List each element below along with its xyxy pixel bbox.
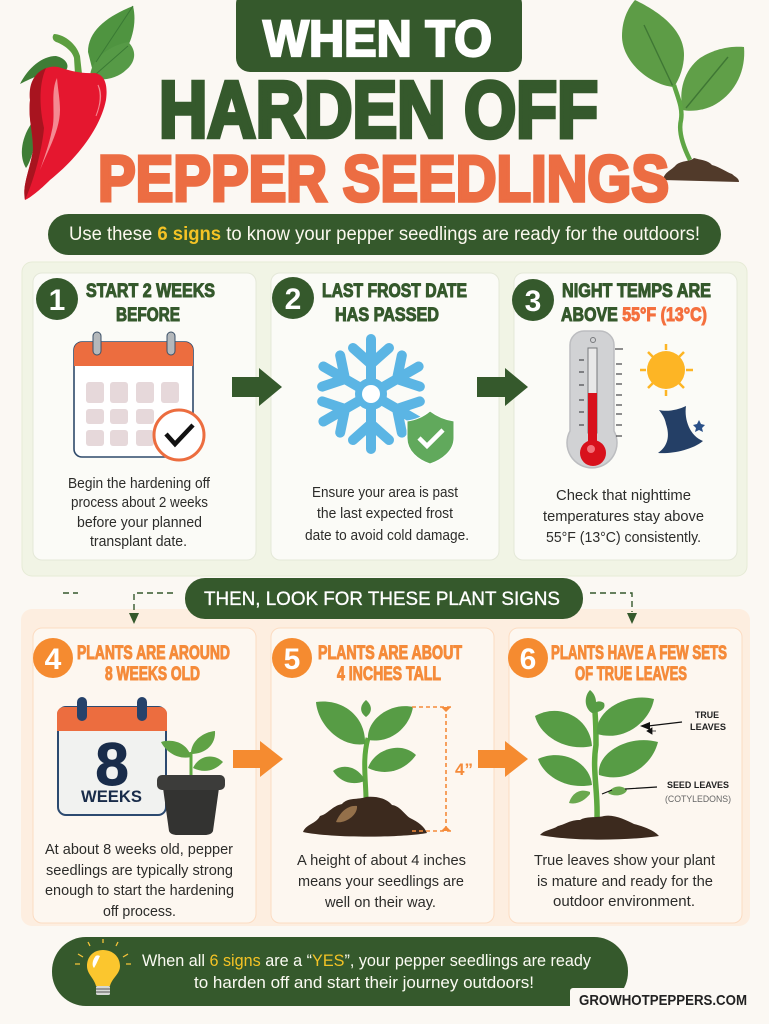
- icon: seedling with soil: [622, 0, 744, 182]
- description 5: means your seedlings are: [298, 874, 464, 890]
- heading 3: ABOVE 55°F (13°C): [561, 305, 707, 326]
- description 1: transplant date.: [90, 534, 187, 550]
- closing message: When all 6 signs are a “YES”, your pepper seedlings are ready: [142, 951, 591, 970]
- badge 5: [272, 638, 312, 678]
- card 3: night temps: [512, 273, 737, 560]
- heading 2: [322, 281, 467, 326]
- height marker: 4 inches: [412, 707, 473, 831]
- icon: red pepper: [20, 6, 134, 200]
- description 2: the last expected frost: [317, 506, 453, 522]
- badge 6: [508, 638, 548, 678]
- badge 4: [33, 638, 73, 678]
- icon: 8 weeks calendar: WEEKS: [81, 787, 142, 806]
- section banner: then look for plant signs: THEN, LOOK FOR THESE PLANT SIGNS: [204, 589, 560, 610]
- subtitle banner: Use these 6 signs to know your pepper seedlings are ready for the outdoors!: [69, 224, 700, 245]
- height marker: 4 inches: 4”: [455, 760, 473, 779]
- label: seed leaves: [602, 780, 731, 805]
- description 1: process about 2 weeks: [71, 495, 208, 511]
- card 4: 8 weeks old: [33, 628, 256, 923]
- icon: potted seedling: [157, 731, 225, 835]
- panel: plant signs: [21, 609, 750, 926]
- subtitle banner: [48, 214, 721, 255]
- website credit: [570, 988, 769, 1024]
- card 2: last frost date: [271, 273, 499, 560]
- icon: plant in soil: [303, 700, 427, 837]
- section banner: then look for plant signs: [185, 578, 583, 619]
- description 1: Begin the hardening off: [68, 476, 211, 492]
- heading 5: [318, 643, 462, 685]
- icon: light bulb: [75, 939, 131, 995]
- badge 5: 5: [284, 643, 300, 676]
- icon: calendar with check: [74, 332, 204, 460]
- panel: timing signs: [22, 262, 747, 576]
- badge 1: [36, 278, 78, 320]
- heading 5: PLANTS ARE ABOUT: [318, 643, 462, 664]
- connector: dashed arrow right: [590, 593, 637, 624]
- heading 1: [86, 281, 215, 326]
- icon: moon and star: [658, 406, 705, 453]
- icon: plant with labelled leaves: [535, 690, 659, 840]
- card 6: true leaves: [508, 628, 742, 923]
- heading 3: [561, 281, 711, 326]
- closing message: to harden off and start their journey outdoors!: [194, 973, 534, 992]
- heading 1: START 2 WEEKS: [86, 281, 215, 302]
- description 5: A height of about 4 inches: [297, 853, 466, 869]
- description 4: [45, 842, 234, 920]
- heading 2: LAST FROST DATE: [322, 281, 467, 302]
- description 5: [297, 853, 466, 911]
- title pill: when to: WHEN TO: [263, 10, 492, 67]
- footer banner: [52, 937, 628, 1006]
- heading 4: 8 WEEKS OLD: [105, 664, 200, 685]
- description 2: Ensure your area is past: [312, 485, 458, 501]
- arrow: card 1 to 2: [232, 368, 282, 406]
- description 3: 55°F (13°C) consistently.: [546, 530, 701, 546]
- description 5: well on their way.: [324, 895, 436, 911]
- arrow: card 5 to 6: [478, 741, 528, 777]
- arrow: card 4 to 5: [233, 741, 283, 777]
- badge 3: [512, 279, 554, 321]
- heading 4: PLANTS ARE AROUND: [77, 643, 230, 664]
- heading 6: [551, 643, 727, 685]
- badge 1: 1: [49, 284, 65, 317]
- arrow: card 2 to 3: [477, 368, 528, 406]
- description 3: Check that nighttime: [556, 488, 691, 504]
- label: true leaves: LEAVES: [690, 722, 726, 733]
- label: seed leaves: (COTYLEDONS): [665, 794, 731, 805]
- description 4: seedlings are typically strong: [46, 863, 233, 879]
- description 2: date to avoid cold damage.: [305, 528, 469, 544]
- description 1: before your planned: [77, 515, 202, 531]
- description 6: outdoor environment.: [553, 894, 695, 910]
- title pill: when to: [236, 0, 522, 72]
- description 6: True leaves show your plant: [534, 853, 715, 869]
- description 1: [68, 476, 211, 550]
- icon: sun: [640, 344, 693, 396]
- title line: harden off: HARDEN OFF: [159, 65, 598, 154]
- heading 3: NIGHT TEMPS ARE: [562, 281, 711, 302]
- heading 1: BEFORE: [116, 305, 180, 326]
- badge 6: 6: [520, 643, 536, 676]
- description 3: [543, 488, 704, 546]
- title: [98, 0, 669, 215]
- icon: 8 weeks calendar: [57, 697, 167, 815]
- label: seed leaves: SEED LEAVES: [667, 780, 729, 791]
- card 5: 4 inches tall: [271, 628, 494, 923]
- description 3: temperatures stay above: [543, 509, 704, 525]
- description 4: At about 8 weeks old, pepper: [45, 842, 233, 858]
- badge 3: 3: [525, 285, 541, 318]
- title line: pepper seedlings: PEPPER SEEDLINGS: [98, 142, 669, 215]
- badge 2: 2: [285, 283, 301, 316]
- description 2: [305, 485, 469, 544]
- label: true leaves: [640, 710, 726, 734]
- badge 4: 4: [45, 643, 62, 676]
- description 6: [534, 853, 715, 910]
- heading 6: OF TRUE LEAVES: [575, 664, 687, 685]
- heading 2: HAS PASSED: [335, 305, 439, 326]
- icon: shield check: [407, 411, 454, 464]
- heading 5: 4 INCHES TALL: [337, 664, 441, 685]
- icon: snowflake: [314, 339, 428, 449]
- description 6: is mature and ready for the: [537, 874, 713, 890]
- label: true leaves: TRUE: [695, 710, 719, 721]
- website credit: GROWHOTPEPPERS.COM: [579, 992, 747, 1009]
- description 4: enough to start the hardening: [45, 883, 234, 899]
- icon: 8 weeks calendar: 8: [95, 731, 129, 798]
- heading 4: [77, 643, 230, 685]
- card 1: start 2 weeks before: [33, 273, 256, 560]
- icon: thermometer: [567, 331, 623, 468]
- badge 2: [272, 277, 314, 319]
- connector: dashed arrow left: [63, 593, 173, 624]
- closing message: [142, 951, 591, 992]
- description 4: off process.: [103, 904, 176, 920]
